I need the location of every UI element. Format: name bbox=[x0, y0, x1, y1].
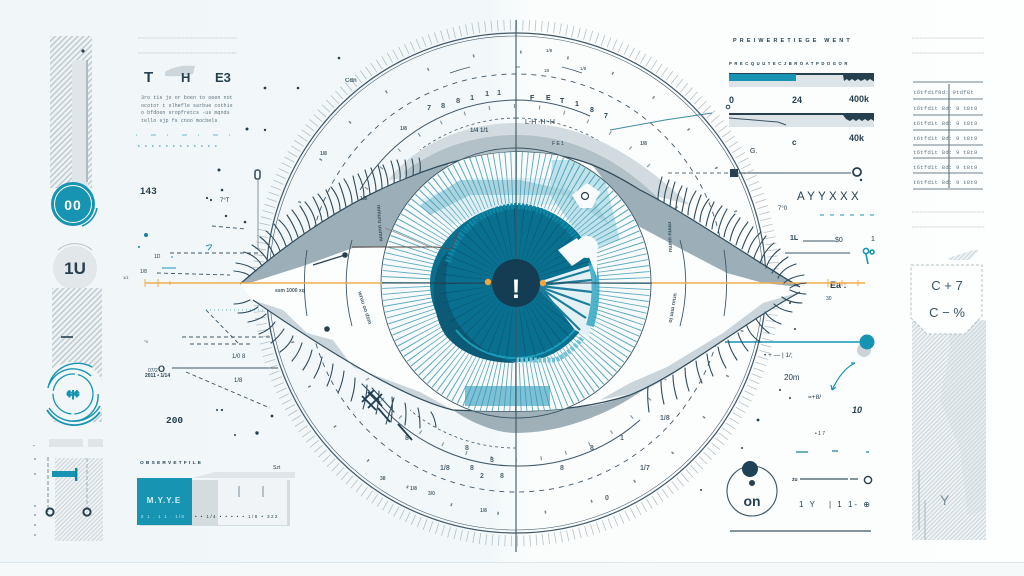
value 40k: 40k bbox=[849, 133, 865, 143]
paragraph bbox=[141, 95, 233, 124]
ring numerals top: 8 bbox=[441, 101, 445, 110]
scatter left bbox=[123, 57, 340, 436]
ring numerals bottom: 8 bbox=[500, 473, 504, 480]
iris outline bbox=[381, 148, 651, 418]
ring numerals top: 1 bbox=[470, 93, 474, 102]
data table: t6tfd1t 8d: 9 t8t9 bbox=[913, 179, 978, 186]
ring numerals top: 8 bbox=[456, 96, 460, 105]
tiny labels: 1 bbox=[871, 236, 875, 243]
eye outlines bbox=[240, 152, 800, 411]
heading: H bbox=[181, 70, 190, 85]
ring labels top right bbox=[525, 48, 608, 147]
progress bar 1 bbox=[729, 73, 874, 87]
right subheading: PRECQUUTECJBROATPDOGOR bbox=[729, 61, 850, 66]
ring numerals bottom: 1/8 bbox=[660, 415, 670, 422]
tiny labels: Ea : bbox=[830, 280, 847, 290]
badge 00 bbox=[51, 182, 97, 226]
ring labels top right: 1 bbox=[575, 101, 579, 108]
vertical ring labels: ssm 1000 xq bbox=[275, 288, 305, 294]
tiny labels: 30 bbox=[826, 296, 832, 302]
small dial: on bbox=[743, 493, 761, 509]
bar scale bbox=[729, 94, 870, 105]
progress bar 2 bbox=[729, 113, 874, 127]
data table: t6tfd1t 8d: 9 t8t9 bbox=[913, 120, 978, 127]
lower eyelid light band bbox=[253, 292, 800, 410]
ring numerals bottom: 2 bbox=[480, 473, 484, 480]
paragraph: 3ro t1s jo or boen to oeen not bbox=[141, 95, 233, 101]
ring numerals top: Cdn bbox=[345, 78, 357, 84]
paragraph: ocotor t slhefle sarbue cothis bbox=[141, 103, 233, 109]
eyeball bbox=[240, 152, 800, 411]
ring numerals top: 1/8 bbox=[400, 126, 407, 132]
right labels bbox=[764, 352, 869, 452]
bar scale: 400k bbox=[849, 94, 870, 104]
badge 1U: 1U bbox=[64, 259, 86, 278]
ring numerals top: 1 bbox=[485, 89, 489, 98]
ring labels top right: F bbox=[530, 95, 535, 102]
right labels: • 1 7 bbox=[815, 431, 825, 437]
right heading: PREIWERETIEGE WENT bbox=[733, 38, 853, 44]
ring numerals bottom: 1/7 bbox=[640, 465, 650, 472]
vertical axis bbox=[515, 20, 517, 552]
scatter left: 07/2 bbox=[148, 368, 158, 374]
iris inner rays bbox=[466, 233, 566, 333]
ring labels top right: 1/8 bbox=[546, 48, 553, 53]
mini bar chart bbox=[34, 439, 103, 541]
lower hatched gauge bbox=[52, 288, 102, 422]
lattice marker bbox=[362, 390, 412, 440]
ring numerals bottom: 8 bbox=[405, 435, 409, 442]
upper lashes right bbox=[658, 177, 806, 288]
ring numerals bottom bbox=[380, 415, 670, 514]
ring numerals top: 1/8 bbox=[360, 196, 367, 202]
ring numerals bottom: 8 bbox=[470, 465, 474, 472]
header rules bbox=[138, 38, 237, 53]
top hatched gauge bbox=[50, 36, 92, 188]
small dial bbox=[727, 461, 777, 516]
ring labels top right: L-H -H -H bbox=[525, 119, 555, 126]
ring labels top right: T bbox=[560, 98, 565, 105]
teal bands bbox=[420, 160, 620, 406]
vertical ring labels: uruu mm lo bbox=[667, 293, 678, 324]
ring numerals bottom: 1/8 bbox=[410, 486, 417, 492]
scatter left: 1/0 8 bbox=[232, 354, 246, 360]
ring numerals bottom: 8 bbox=[590, 445, 594, 452]
scatter left: °0 bbox=[144, 339, 149, 344]
upper eyelid mid band bbox=[404, 135, 660, 200]
outer measuring rings bbox=[258, 25, 774, 541]
ring numerals bottom: 1/8 bbox=[440, 465, 450, 472]
upper lashes left bbox=[234, 158, 420, 276]
dashed formula card: C + 7 bbox=[931, 278, 963, 293]
heading: E3 bbox=[215, 70, 231, 85]
ring labels top right: 18 bbox=[544, 68, 550, 73]
ring numerals bottom: 1/8 bbox=[480, 508, 487, 514]
lower lashes left bbox=[234, 300, 436, 428]
ring numerals bottom: 8 bbox=[465, 445, 469, 452]
left leader lines bbox=[157, 170, 278, 408]
ring numerals bottom: 38 bbox=[380, 476, 386, 482]
bar scale: 0 bbox=[729, 95, 734, 105]
dial legend: | 1 1- ⊕ bbox=[829, 500, 872, 509]
ring labels top right: 7 bbox=[604, 113, 608, 120]
scatter left: O bbox=[158, 364, 165, 374]
data table bbox=[913, 82, 983, 189]
ring numerals bottom: 3/0 bbox=[428, 491, 435, 497]
lower lashes right bbox=[648, 290, 806, 412]
teal callout line bbox=[725, 334, 874, 357]
dial legend bbox=[792, 476, 872, 509]
pupil: ! bbox=[512, 274, 520, 304]
leader line with node bbox=[668, 168, 862, 181]
right column bbox=[668, 38, 986, 540]
letter row: AYYXXX bbox=[797, 191, 862, 203]
data table: t6tfd1t 8d: 9 t8t9 bbox=[913, 135, 978, 142]
ring numerals bottom: 3 bbox=[490, 457, 494, 464]
ring numerals bottom: 8 bbox=[560, 465, 564, 472]
dark iris bbox=[430, 205, 596, 362]
dashed formula card: C − % bbox=[929, 305, 965, 320]
dashed teal rule bbox=[820, 214, 875, 216]
dial legend: zu bbox=[792, 477, 798, 483]
badge 1U bbox=[53, 244, 97, 290]
teal panel label: OBSERVETFILE bbox=[140, 460, 203, 466]
tiny labels: 1L bbox=[790, 235, 799, 242]
value 10: 10 bbox=[852, 405, 862, 415]
teal arrow bbox=[831, 363, 855, 390]
bottom arrow rule bbox=[730, 530, 871, 532]
teal stat cards: 0 1 . 1 1 . 1/8 bbox=[141, 514, 185, 519]
scatter left: 1D bbox=[154, 254, 161, 260]
ring numerals top: 1/4 1/1 bbox=[470, 128, 489, 134]
ring labels top right: 8 bbox=[590, 107, 594, 114]
tiny labels: $0 bbox=[835, 237, 843, 244]
white tag with icon bbox=[572, 183, 600, 208]
lower eyelid bottom band bbox=[453, 387, 647, 433]
left text block bbox=[136, 38, 295, 526]
teal concentric dial bbox=[41, 362, 105, 426]
tiny labels bbox=[750, 148, 875, 302]
left column: hatched gauges and badges bbox=[34, 36, 105, 541]
teal leader top right bbox=[610, 113, 712, 130]
ring numerals top bbox=[320, 78, 647, 202]
scatter left: 1/8 bbox=[140, 269, 147, 275]
right labels: • + — | 1/; bbox=[764, 352, 793, 359]
data table: t6tfd1t 8d: 9 t8t9 bbox=[913, 105, 978, 112]
ring numerals top: 1/8 bbox=[640, 141, 647, 147]
data table: t6tfd1f8d: 9tdf8t bbox=[913, 89, 974, 96]
scatter left: 1/8 bbox=[234, 378, 243, 384]
vertical ring labels: rmnu uumu bbox=[666, 222, 673, 252]
teal inner ring bbox=[448, 206, 576, 262]
hatch strip bbox=[948, 250, 980, 260]
number 143: 143 bbox=[140, 186, 157, 197]
vertical ring labels: wruu oo dsm bbox=[356, 290, 372, 325]
iris callout bbox=[352, 228, 458, 249]
scatter left: 7°T bbox=[220, 198, 230, 204]
data table: t6tfd1t 8d: 9 t8t9 bbox=[913, 164, 978, 171]
dial legend: 1 Y bbox=[799, 500, 817, 509]
white glint cap bbox=[558, 236, 598, 277]
teal icon bbox=[863, 248, 874, 264]
scatter left: 2011 • 1/14 bbox=[145, 373, 170, 379]
iris disk bbox=[386, 152, 636, 411]
rules top right bbox=[912, 38, 985, 227]
iris bbox=[381, 148, 651, 418]
ring numerals top: 1/8 bbox=[320, 151, 327, 157]
badge 00: 00 bbox=[64, 197, 82, 213]
tiny labels: G. bbox=[750, 148, 757, 155]
bar scale: 24 bbox=[792, 95, 802, 105]
ring labels top right: E bbox=[546, 95, 551, 102]
small scatter right bbox=[700, 105, 796, 491]
teal stat cards bbox=[137, 465, 295, 526]
iris rays bbox=[409, 176, 623, 390]
ring numerals bottom: 1 bbox=[620, 435, 624, 442]
data table: t6tfd1t 8d: 9 t8t9 bbox=[913, 149, 978, 156]
dashed formula card bbox=[911, 265, 982, 334]
teal stat cards: Szt bbox=[273, 465, 281, 471]
ring numerals top: 7 bbox=[427, 103, 431, 112]
white ray wedge bbox=[538, 264, 596, 337]
pupil bbox=[485, 259, 546, 307]
vertical ring labels: mmuru uumm bbox=[375, 205, 384, 242]
tall hatched panel bbox=[912, 320, 986, 540]
teal stat cards: M.Y.Y.E bbox=[147, 496, 181, 505]
dashed teal rules bbox=[136, 134, 240, 136]
inner eye rings bbox=[304, 240, 727, 326]
right labels: 20m bbox=[784, 373, 800, 382]
marker c: c bbox=[792, 138, 797, 147]
tall hatched panel: Y bbox=[940, 492, 950, 508]
scatter left: 1/1 bbox=[123, 275, 129, 280]
scale bar bbox=[785, 241, 850, 253]
number 200: 200 bbox=[166, 415, 183, 426]
ring numerals bottom: 0 bbox=[605, 495, 609, 502]
ring numerals top: 1 bbox=[497, 88, 501, 97]
vertical ring labels bbox=[275, 205, 678, 325]
heading: T bbox=[144, 69, 153, 86]
ring labels top right: F E 1 bbox=[552, 141, 564, 147]
dark crescent bbox=[434, 248, 516, 363]
ring labels top right: 1/8 bbox=[580, 66, 587, 71]
wedge marker dots bbox=[313, 252, 348, 332]
tiny labels: 7°0 bbox=[778, 206, 788, 212]
main eye diagram bbox=[145, 20, 865, 552]
right labels: =+8/ bbox=[808, 394, 821, 401]
heading bbox=[144, 66, 231, 86]
lid shadow wedges bbox=[240, 162, 800, 287]
teal concentric dial: ¢|¢ bbox=[67, 389, 79, 399]
horizontal orange axis bbox=[145, 279, 865, 287]
upper eyelid pale band bbox=[388, 123, 690, 205]
paragraph: o bfdoen sropfretcs -us mqnds bbox=[141, 110, 230, 116]
paragraph: tello sjp fs cnoo mocbels bbox=[141, 118, 217, 124]
teal stat cards: • • 1/4 • • • • • 1/8 • 322 bbox=[195, 514, 279, 519]
